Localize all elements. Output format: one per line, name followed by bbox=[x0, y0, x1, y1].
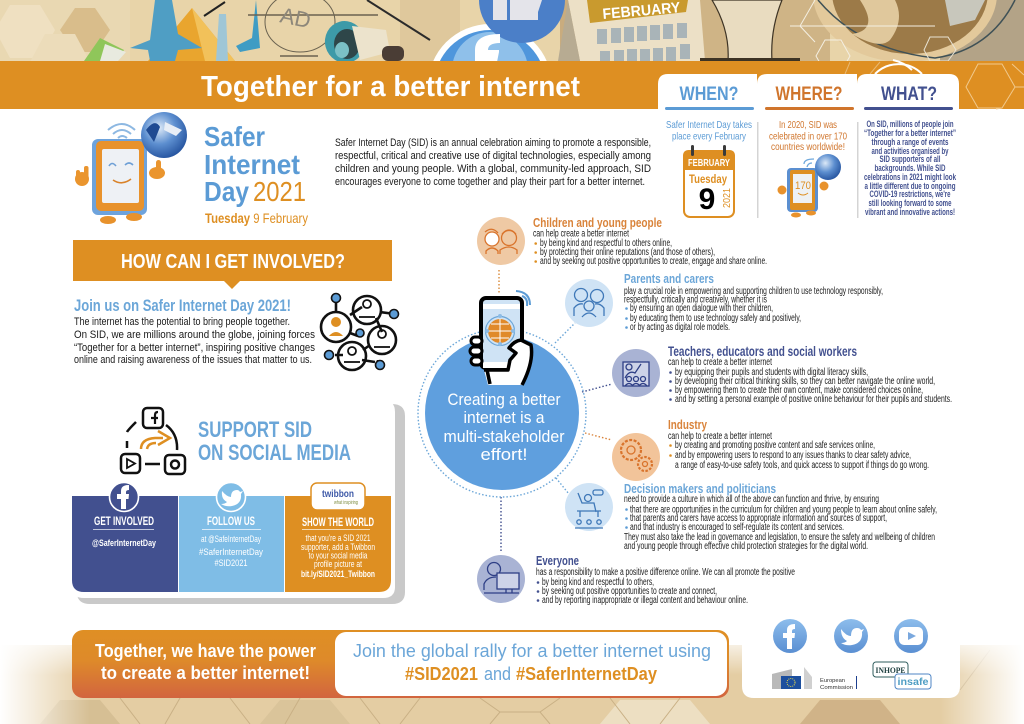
stakeholder: teachers, educators and social workers bbox=[612, 344, 952, 405]
icon: classroom bbox=[612, 349, 660, 397]
icon: children bbox=[477, 217, 525, 265]
stakeholder: parents and carers: play a crucial role in empowering and supporting children to use technology responsibly, bbox=[624, 286, 883, 297]
stakeholder: teachers, educators and social workers: can help to create a better internet bbox=[668, 357, 772, 368]
stakeholder: decision makers and politicians: that parents and carers have access to appropriate information and sources of support, bbox=[630, 513, 887, 524]
stakeholder: teachers, educators and social workers: Teachers, educators and social workers bbox=[668, 344, 857, 359]
icon: speaker bbox=[565, 483, 613, 531]
where text: In 2020, SID was bbox=[779, 119, 837, 131]
stakeholder: teachers, educators and social workers: by equipping their pupils and students with digital literacy skills, bbox=[675, 367, 868, 378]
icon: smiling tablet mascot bbox=[75, 112, 187, 224]
intro paragraph: children and young people. With a global, community-led approach, SID bbox=[335, 163, 651, 175]
column: show the world: profile picture at bbox=[314, 559, 362, 569]
icon: gears bbox=[612, 433, 660, 481]
band hexagon decoration bbox=[845, 60, 1024, 109]
panel: support sid on social media bbox=[72, 400, 405, 604]
stakeholder: children and young people: by protecting their online reputations (and those of others), bbox=[540, 247, 715, 258]
intro paragraph: respectful, critical and creative use of digital technologies, especially among bbox=[335, 150, 651, 162]
top orange band bbox=[0, 61, 1024, 109]
support heading: ON SOCIAL MEDIA bbox=[198, 440, 351, 465]
logo: european commission: European bbox=[820, 678, 845, 684]
column: follow us: FOLLOW US bbox=[207, 514, 255, 528]
collage: hexagon lines bbox=[790, 0, 956, 61]
slogan right: #SaferInternetDay bbox=[516, 664, 657, 684]
icon: family bbox=[565, 279, 613, 327]
icon: facebook bbox=[773, 619, 807, 653]
stakeholder: children and young people: by being kind and respectful to others online, bbox=[540, 238, 672, 249]
join us text: “Together for a better internet”, inspiring positive changes bbox=[74, 342, 316, 354]
collage: statue bbox=[130, 0, 260, 61]
logo text: Safer Internet Day 2021: Tuesday 9 February bbox=[205, 210, 308, 226]
where text bbox=[769, 119, 847, 153]
icon: calendar bbox=[683, 145, 735, 217]
title: Together for a better internet bbox=[201, 71, 580, 103]
what text: celebrations in 2021 might look bbox=[864, 172, 956, 183]
when text bbox=[666, 119, 752, 142]
collage: calendar bbox=[558, 0, 705, 61]
column: follow us: #SaferInternetDay bbox=[199, 547, 263, 558]
stakeholder: everyone: by being kind and respectful to others, bbox=[542, 577, 654, 588]
logo text: Safer Internet Day 2021: Day bbox=[204, 176, 249, 207]
what text: vibrant and innovative actions! bbox=[865, 207, 955, 218]
tab: what: WHAT? bbox=[881, 84, 937, 105]
bottom call to action bbox=[72, 630, 729, 698]
stakeholder: parents and carers: by educating them to use technology safely and positively, bbox=[630, 313, 801, 324]
stakeholder: everyone: by seeking out positive opportunities to create and connect, bbox=[542, 586, 717, 597]
icon: calendar: 2021 bbox=[721, 188, 733, 208]
support heading: SUPPORT SID bbox=[198, 417, 312, 442]
centre text: multi-stakeholder bbox=[444, 428, 565, 446]
join us text: The internet has the potential to bring people together. bbox=[74, 316, 290, 328]
icon: twitter bbox=[834, 619, 868, 653]
when text: place every February bbox=[672, 130, 747, 142]
logo: european commission bbox=[772, 667, 857, 691]
icon: social media cycle bbox=[121, 408, 185, 474]
column: show the world: that you're a SID 2021 bbox=[306, 533, 370, 543]
collage: globe bbox=[813, 0, 1015, 62]
stakeholder: everyone: has a responsibility to make a positive difference online. We can all promote the positive bbox=[536, 567, 795, 578]
stakeholder: industry: Industry bbox=[668, 417, 708, 432]
column: show the world: bit.ly/SID2021_Twibbon bbox=[301, 569, 375, 579]
logo: inhope and insafe bbox=[873, 662, 931, 689]
tab: when: WHEN? bbox=[680, 84, 738, 105]
join us text bbox=[74, 316, 316, 366]
collage: sketch lines bbox=[204, 0, 430, 56]
column: show the world: twibbon bbox=[322, 489, 354, 500]
where text: celebrated in over 170 bbox=[769, 130, 847, 142]
slogan right bbox=[353, 641, 711, 684]
what text: “Together for a better internet” bbox=[864, 128, 956, 139]
stakeholder: decision makers and politicians: Decision makers and politicians bbox=[624, 481, 776, 496]
icon: person at computer bbox=[477, 555, 525, 603]
icon: calendar: 9 bbox=[699, 183, 715, 216]
tab: when bbox=[658, 74, 757, 110]
centre text: effort! bbox=[480, 446, 528, 464]
centre text: Creating a better bbox=[448, 391, 561, 409]
stakeholder: industry: and by empowering users to respond to any issues thanks to clear safety advice, bbox=[675, 450, 911, 461]
stakeholder: children and young people: Children and young people bbox=[533, 215, 662, 230]
when text: Safer Internet Day takes bbox=[666, 119, 752, 131]
stakeholder: industry: can help to create a better internet bbox=[668, 431, 772, 442]
logo: inhope and insafe: insafe bbox=[898, 677, 929, 688]
stakeholder: industry bbox=[612, 417, 929, 481]
top collage background bbox=[0, 0, 1024, 61]
collage: megaphone bbox=[324, 21, 404, 61]
support heading bbox=[198, 417, 351, 465]
column: show the world: to your social media bbox=[308, 550, 368, 560]
logo text: Safer Internet Day 2021: Safer bbox=[204, 121, 265, 152]
collage: vase bbox=[700, 0, 800, 61]
column: get involved bbox=[72, 482, 178, 592]
icon: mascot 170: 170 bbox=[795, 180, 811, 192]
slogan right: #SID2021 bbox=[405, 664, 478, 684]
what text: On SID, millions of people join bbox=[866, 119, 954, 130]
stakeholder: everyone bbox=[477, 553, 795, 606]
slogan left: Together, we have the power bbox=[95, 641, 316, 661]
column: get involved: GET INVOLVED bbox=[94, 514, 154, 528]
stakeholder: parents and carers: Parents and carers bbox=[624, 271, 714, 286]
connector lines bbox=[499, 270, 612, 552]
tab: where bbox=[757, 74, 857, 110]
stakeholder: decision makers and politicians: and young people through effective child protection strategies for the digital world. bbox=[624, 541, 868, 552]
what text: SID supporters of all bbox=[880, 154, 940, 165]
logo text: Safer Internet Day 2021: 2021 bbox=[253, 176, 306, 207]
what text bbox=[864, 119, 956, 218]
stakeholder: parents and carers: by ensuring an open dialogue with their children, bbox=[630, 303, 773, 314]
column: show the world: what inspiring bbox=[334, 500, 358, 506]
stakeholder: everyone: Everyone bbox=[536, 553, 579, 568]
stakeholder: decision makers and politicians bbox=[565, 481, 937, 552]
stakeholder: children and young people: and by seeking out positive opportunities to create, engage and share online. bbox=[540, 256, 767, 267]
intro paragraph: encourages everyone to come together and play their part for a better internet. bbox=[335, 176, 645, 188]
logo panel bbox=[742, 610, 960, 698]
join us heading: Join us on Safer Internet Day 2021! bbox=[74, 297, 291, 315]
collage: facebook logo bbox=[433, 0, 565, 61]
slogan right: Join the global rally for a better internet using bbox=[353, 641, 711, 661]
tab: what bbox=[857, 74, 959, 110]
column: show the world: supporter, add a Twibbon bbox=[301, 542, 375, 552]
column: follow us: at @SafeInternetDay bbox=[201, 534, 261, 545]
central circle with dotted ring bbox=[418, 291, 586, 497]
stakeholder: decision makers and politicians: and that industry is encouraged to self-regulate its content and services. bbox=[630, 522, 844, 533]
logo text: Safer Internet Day 2021 bbox=[204, 121, 308, 226]
collage: pyramid bbox=[148, 8, 235, 61]
what text: still looking forward to some bbox=[868, 198, 952, 209]
collage: airplane ticket bbox=[84, 38, 126, 61]
column: show the world: SHOW THE WORLD bbox=[302, 515, 374, 529]
intro paragraph: Safer Internet Day (SID) is an annual celebration aiming to promote a responsible, bbox=[335, 137, 651, 149]
icon: people network bbox=[321, 294, 398, 370]
logo: inhope and insafe: INHOPE bbox=[876, 666, 906, 675]
join us text: On SID, we are millions around the globe, joining forces bbox=[74, 329, 316, 341]
how can i get involved banner bbox=[73, 240, 392, 289]
icon: youtube bbox=[894, 619, 928, 653]
icon: hand holding phone bbox=[470, 291, 532, 385]
centre text: internet is a bbox=[464, 409, 545, 427]
slogan left: to create a better internet! bbox=[101, 663, 310, 683]
stakeholder: children and young people bbox=[477, 215, 767, 267]
logo: european commission: Commission bbox=[820, 685, 853, 691]
stakeholder: decision makers and politicians: need to provide a culture in which all of the above can function and thrive, by ensuring bbox=[624, 494, 879, 505]
where text: countries worldwide! bbox=[771, 141, 845, 153]
join us text: online and raising awareness of the issues that matter to us. bbox=[74, 354, 312, 366]
what text: COVID-19 restrictions, we're bbox=[870, 189, 950, 200]
slogan right: and bbox=[484, 664, 511, 684]
what text: through a range of events bbox=[872, 137, 948, 148]
logo text: Safer Internet Day 2021: Internet bbox=[204, 149, 300, 180]
icon: calendar: Tuesday bbox=[689, 172, 727, 186]
what text: and activities organised by bbox=[872, 146, 949, 157]
stakeholder: everyone: and by reporting inappropriate or illegal content and behaviour online. bbox=[542, 595, 748, 606]
stakeholder: parents and carers: respectfully, critically and creatively, whether it is bbox=[624, 294, 767, 306]
what text: backgrounds. While SID bbox=[874, 163, 946, 174]
how can i get involved banner: HOW CAN I GET INVOLVED? bbox=[121, 251, 345, 273]
stakeholder: children and young people: can help create a better internet bbox=[533, 228, 629, 240]
what text: a little different due to ongoing bbox=[864, 181, 956, 192]
stakeholder: parents and carers: or by acting as digital role models. bbox=[630, 322, 730, 333]
icon: mascot 170 bbox=[778, 154, 841, 218]
column: follow us: #SID2021 bbox=[214, 558, 248, 569]
stakeholder: parents and carers bbox=[565, 271, 883, 333]
column: get involved: @SaferInternetDay bbox=[92, 538, 157, 549]
icon: calendar: FEBRUARY bbox=[688, 158, 730, 169]
slogan left bbox=[95, 641, 316, 683]
bottom hexagon background bbox=[0, 645, 1024, 724]
centre text bbox=[444, 391, 565, 464]
column: show the world bbox=[285, 483, 391, 592]
stakeholder: industry: by creating and promoting positive content and safe services online, bbox=[675, 440, 875, 451]
intro paragraph bbox=[335, 137, 651, 188]
column: follow us bbox=[179, 482, 284, 592]
tab: where: WHERE? bbox=[776, 84, 842, 105]
top collage background: AD bbox=[278, 2, 313, 33]
